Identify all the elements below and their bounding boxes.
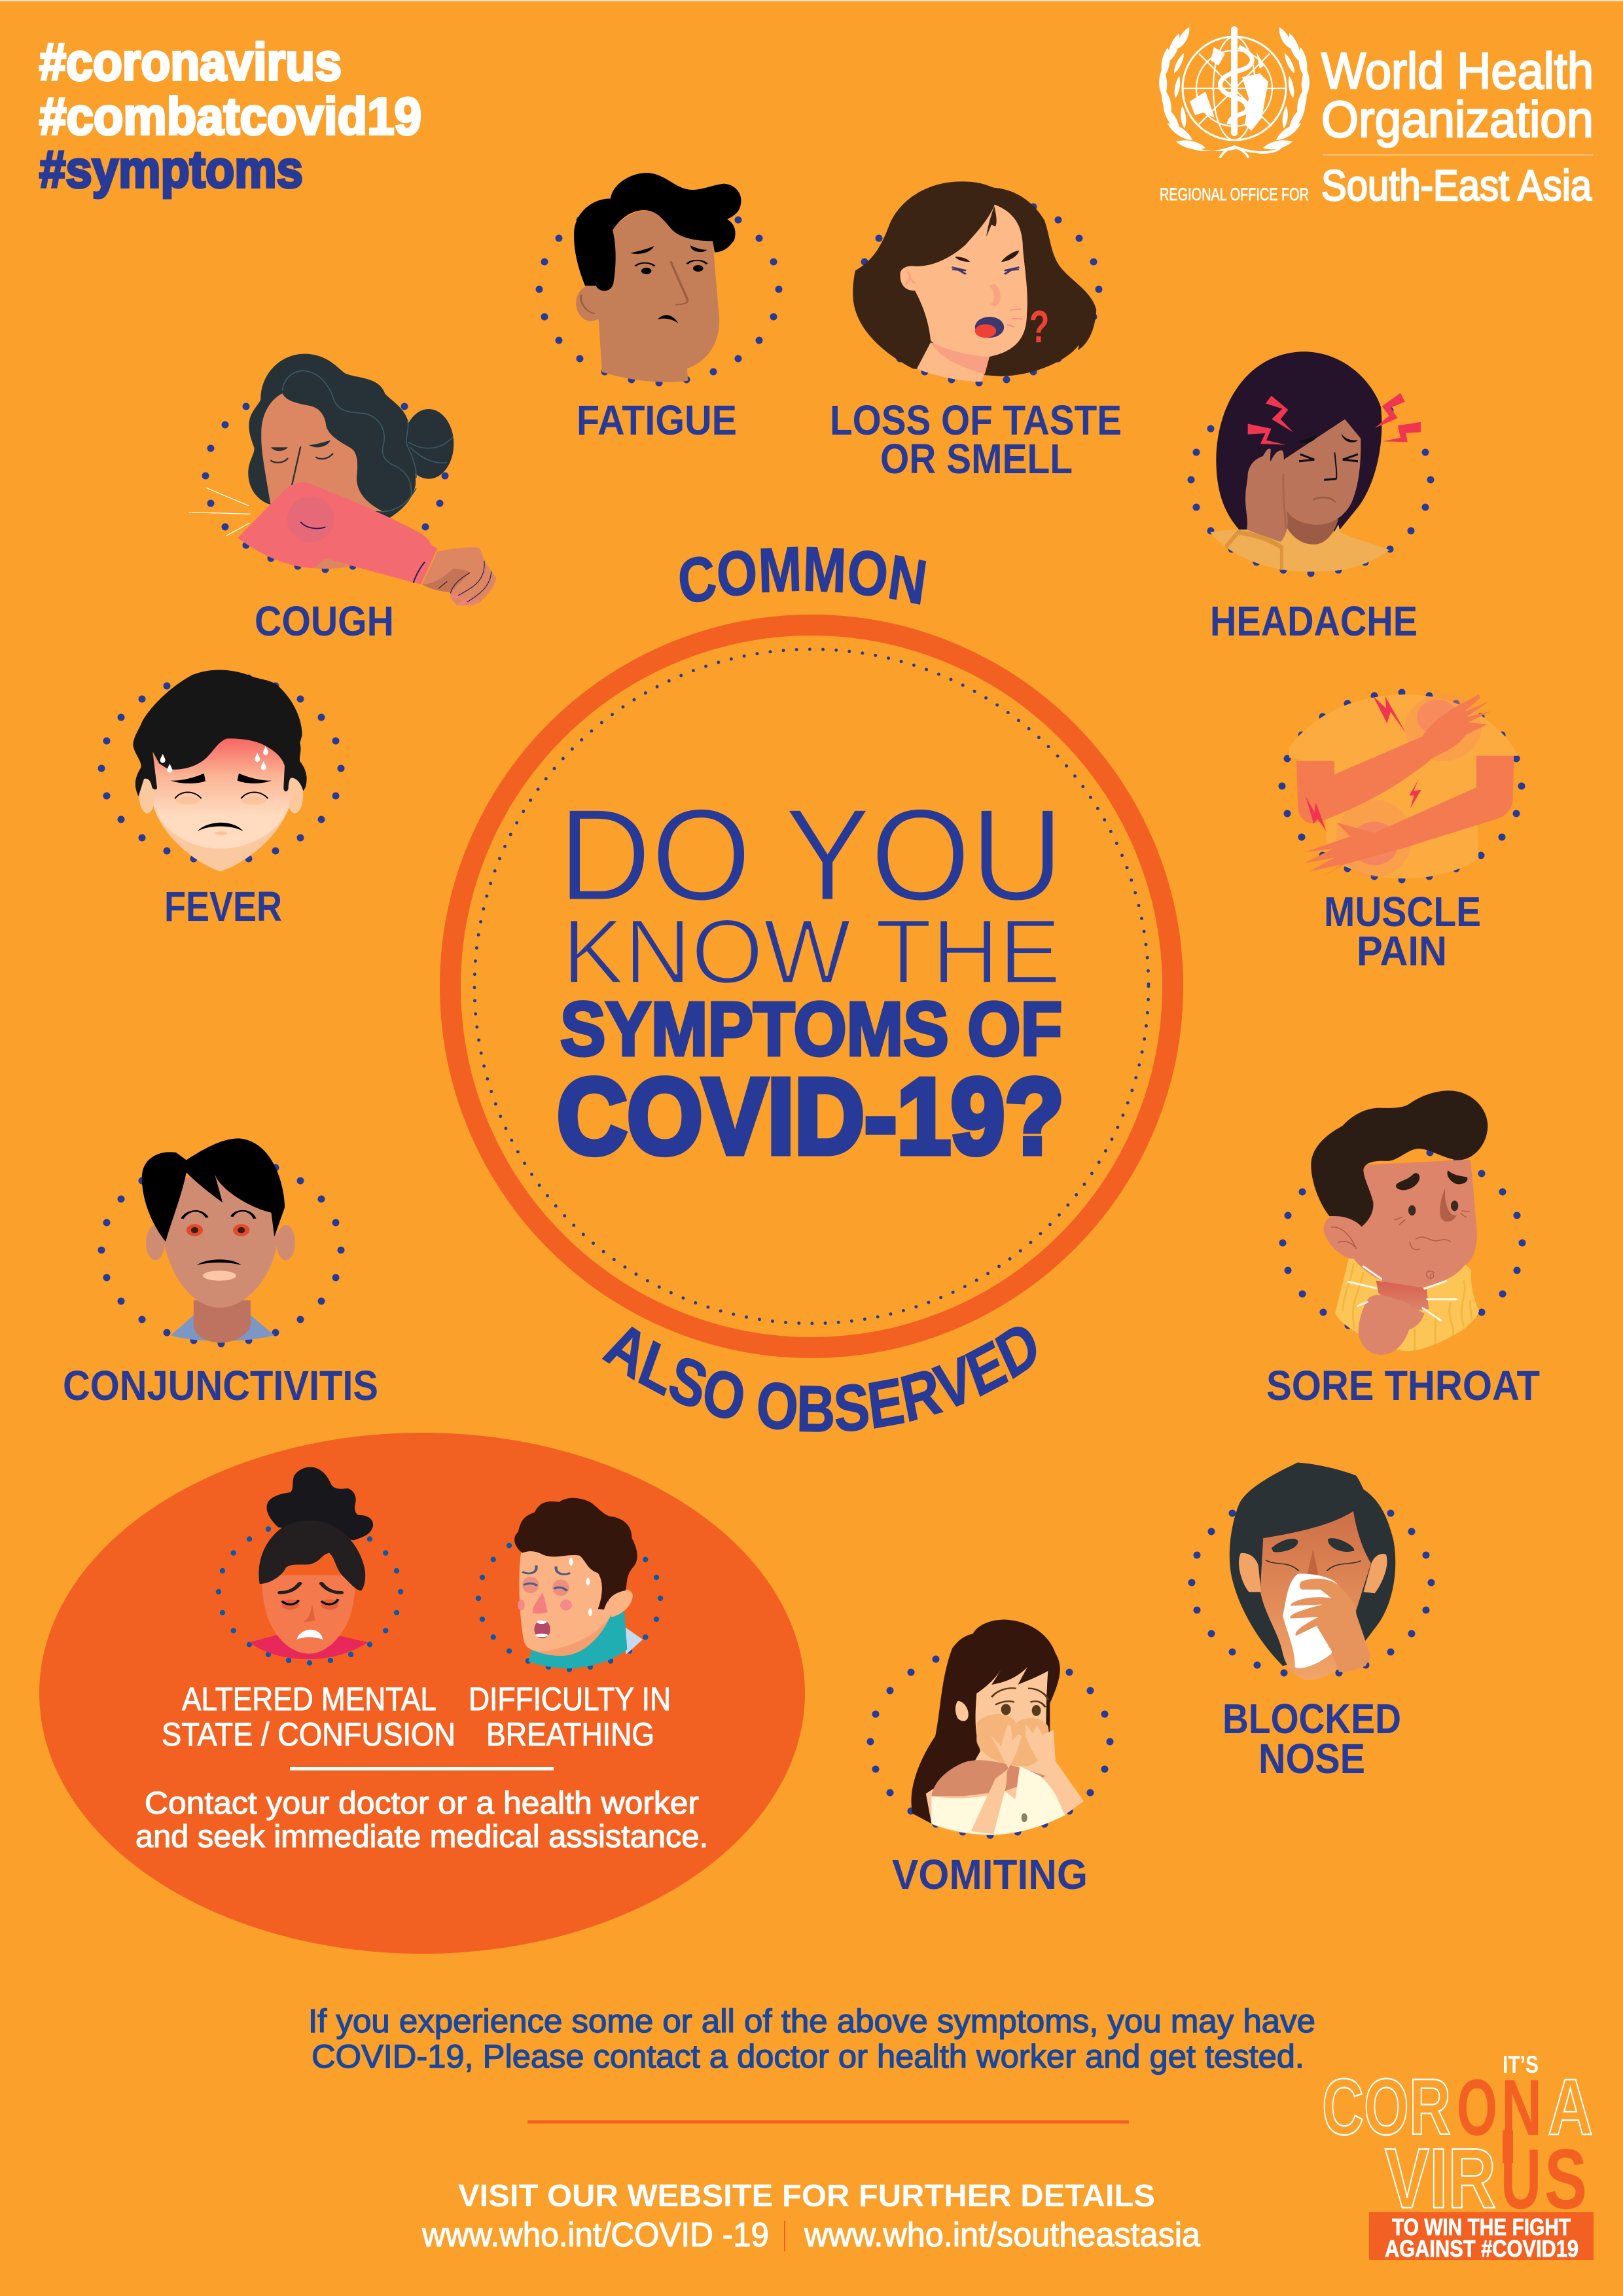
text: advice bbox=[308, 2003, 1315, 2075]
text: difficulty in breathing: DIFFICULTY IN bbox=[469, 1681, 671, 1717]
panel: central circle bbox=[450, 625, 1173, 1348]
heading: common: COMMON bbox=[679, 547, 927, 605]
label: NOSE bbox=[1258, 1735, 1365, 1782]
logo: it's on us campaign: O bbox=[1457, 2063, 1497, 2152]
dotted ring bbox=[1279, 1145, 1526, 1340]
text: advice: COVID-19, Please contact a doctor or health worker and get tested. bbox=[312, 2038, 1304, 2075]
logo wordmark: REGIONAL OFFICE FOR bbox=[1160, 185, 1309, 204]
label: BLOCKED bbox=[1222, 1695, 1401, 1742]
heading: common bbox=[679, 547, 927, 605]
text: website links bbox=[421, 2179, 1200, 2254]
label bbox=[1222, 1695, 1401, 1782]
WHO logo bbox=[1158, 26, 1594, 209]
dotted ring bbox=[1188, 1486, 1435, 1679]
title: DO YOU bbox=[558, 782, 1063, 928]
text: website links: www.who.int/southeastasia bbox=[804, 2216, 1200, 2254]
logo wordmark: World Health bbox=[1321, 42, 1594, 99]
label: FEVER bbox=[164, 883, 282, 930]
dotted ring bbox=[474, 649, 1149, 1323]
label: MUSCLE bbox=[1324, 888, 1481, 935]
dotted ring: altered mental state bbox=[216, 1518, 403, 1666]
panel: sore throat bbox=[1266, 1090, 1540, 1409]
icon: muscle pain arms bbox=[1289, 694, 1518, 878]
text: altered mental state bbox=[162, 1681, 455, 1753]
label bbox=[1324, 888, 1481, 975]
icon: blocked nose figure bbox=[1230, 1463, 1395, 1680]
text: seek assistance: and seek immediate medical assistance. bbox=[135, 1820, 708, 1854]
dotted ring bbox=[98, 672, 344, 865]
icon: fatigue face bbox=[574, 173, 741, 382]
logo: it's on us campaign: A bbox=[1548, 2062, 1593, 2151]
text: difficulty in breathing: BREATHING bbox=[486, 1716, 654, 1753]
dotted ring bbox=[202, 378, 449, 573]
label: PAIN bbox=[1357, 927, 1447, 975]
panel: cough bbox=[188, 354, 496, 645]
logo: it's on us campaign bbox=[1322, 2051, 1594, 2262]
icon: breathing difficulty face bbox=[514, 1498, 643, 1668]
text: advice: If you experience some or all of the above symptoms, you may have bbox=[308, 2003, 1315, 2039]
label bbox=[830, 397, 1122, 482]
text: seek assistance bbox=[135, 1786, 708, 1854]
logo: it's on us campaign: N bbox=[1501, 2063, 1542, 2152]
logo wordmark: South-East Asia bbox=[1321, 161, 1592, 209]
dotted ring bbox=[856, 192, 1102, 386]
panel: urgent symptoms bbox=[39, 1433, 805, 1954]
title: KNOW THE bbox=[562, 900, 1061, 1003]
label: HEADACHE bbox=[1210, 598, 1418, 645]
label: SORE THROAT bbox=[1266, 1362, 1540, 1409]
logo: it's on us campaign: IT’S bbox=[1503, 2051, 1539, 2078]
icon: fever face bbox=[133, 670, 307, 872]
panel: blocked nose bbox=[1188, 1463, 1435, 1782]
hashtags: #coronavirus bbox=[39, 33, 342, 91]
hashtags: #symptoms bbox=[39, 140, 303, 198]
icon: vomiting figure bbox=[911, 1619, 1084, 1835]
icon: sore throat figure bbox=[1311, 1090, 1488, 1355]
label: CONJUNCTIVITIS bbox=[63, 1362, 378, 1409]
logo: it's on us campaign: U bbox=[1501, 2131, 1541, 2227]
panel: conjunctivitis bbox=[63, 1138, 378, 1409]
panel: headache bbox=[1187, 351, 1435, 645]
dotted ring bbox=[98, 1153, 344, 1347]
text: website links: VISIT OUR WEBSITE FOR FURTHER DETAILS bbox=[458, 2179, 1155, 2214]
text: difficulty in breathing bbox=[469, 1681, 671, 1753]
logo: it's on us campaign: AGAINST #COVID19 bbox=[1385, 2235, 1578, 2262]
text: seek assistance: Contact your doctor or a health worker bbox=[145, 1786, 699, 1821]
icon: cough figure bbox=[188, 354, 496, 605]
hashtags bbox=[39, 33, 421, 198]
label: COUGH bbox=[255, 598, 394, 645]
dotted ring bbox=[1187, 382, 1435, 577]
icon: confused face bbox=[249, 1467, 373, 1659]
hashtags: #combatcovid19 bbox=[39, 87, 421, 145]
panel: muscle pain bbox=[1279, 689, 1525, 975]
label: LOSS OF TASTE bbox=[830, 397, 1122, 444]
label: OR SMELL bbox=[880, 435, 1073, 482]
text: altered mental state: ALTERED MENTAL bbox=[182, 1681, 437, 1717]
panel: loss of taste or smell bbox=[830, 181, 1122, 482]
text: website links: www.who.int/COVID -19 bbox=[421, 2216, 769, 2254]
icon: conjunctivitis face bbox=[142, 1138, 295, 1343]
dotted ring bbox=[535, 192, 783, 386]
heading: also observed: ALSO OBSERVED bbox=[602, 1326, 1037, 1432]
icon: headache figure bbox=[1210, 351, 1421, 572]
logo wordmark: Organization bbox=[1321, 90, 1594, 148]
label: FATIGUE bbox=[577, 397, 737, 444]
orange ellipse bbox=[39, 1433, 805, 1954]
icon: loss of taste face bbox=[853, 181, 1096, 382]
title: SYMPTOMS OF bbox=[560, 986, 1062, 1071]
title bbox=[557, 782, 1064, 1176]
logo: it's on us campaign: S bbox=[1544, 2131, 1587, 2227]
logo: it's on us campaign: COR bbox=[1322, 2062, 1451, 2151]
title: COVID-19? bbox=[557, 1056, 1064, 1176]
icon: question mark: ? bbox=[1029, 301, 1049, 352]
text: altered mental state: STATE / CONFUSION bbox=[162, 1716, 455, 1753]
dotted ring bbox=[1279, 689, 1525, 884]
panel: fever bbox=[98, 670, 344, 930]
panel: vomiting bbox=[866, 1619, 1114, 1898]
orange ring bbox=[450, 625, 1173, 1348]
dotted ring bbox=[866, 1644, 1114, 1839]
logo: it's on us campaign: TO WIN THE FIGHT bbox=[1392, 2214, 1571, 2240]
label: VOMITING bbox=[892, 1851, 1088, 1898]
icon: WHO emblem bbox=[1158, 26, 1310, 158]
logo wordmark bbox=[1160, 42, 1594, 209]
panel: fatigue bbox=[535, 173, 783, 444]
dotted ring: difficulty breathing bbox=[476, 1524, 663, 1672]
logo: it's on us campaign: VIR bbox=[1385, 2130, 1496, 2226]
